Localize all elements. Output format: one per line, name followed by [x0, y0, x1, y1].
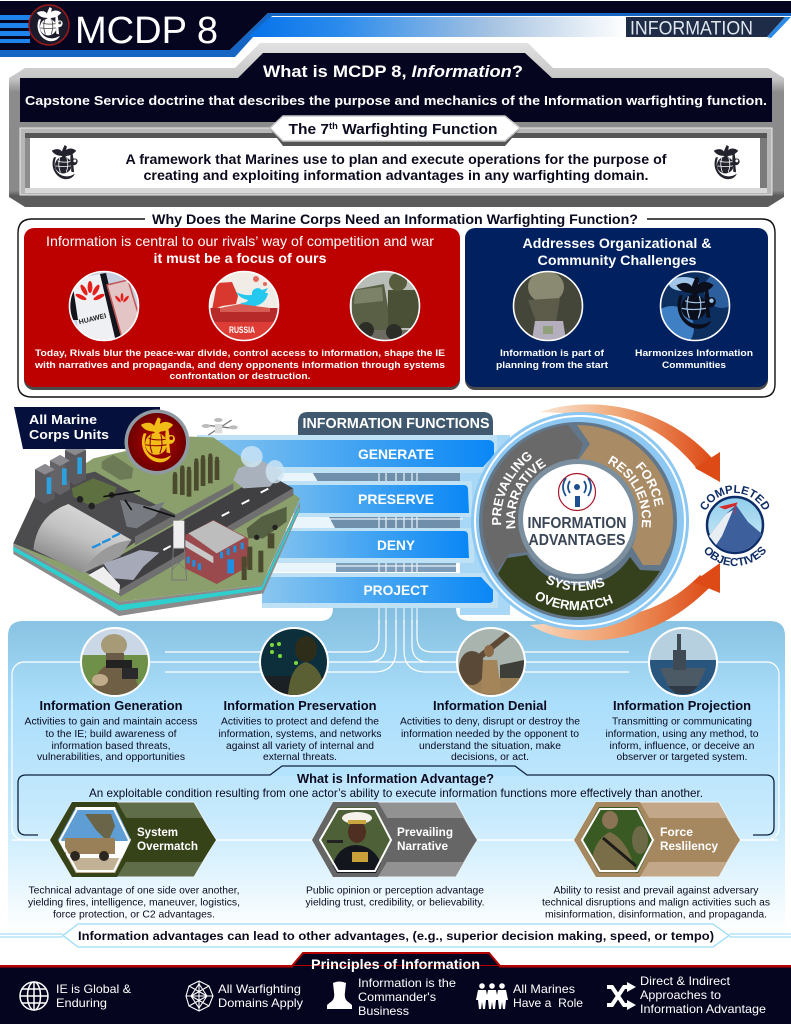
icon: radio tower [558, 474, 596, 510]
drone [202, 418, 238, 435]
hexagon: prevailing narrative: Narrative [397, 839, 448, 853]
callout: other advantages [0, 924, 791, 947]
troops [173, 453, 219, 497]
photo: Huawei phones: HUAWEI [78, 313, 107, 326]
panel: what is MCDP 8 [9, 43, 784, 207]
column: information generation: Activities to gain and maintain access [24, 716, 198, 728]
segment: prevailing narrative [482, 425, 583, 571]
segment: force resilience [577, 425, 673, 565]
ribbon: generate: GENERATE [358, 446, 434, 462]
blue panel captions: Information is part of [500, 348, 605, 359]
principle: domains [186, 981, 303, 1011]
photo: Russia twitter: RUSSIA [229, 325, 255, 336]
illustration: marine corps base diorama [13, 418, 300, 616]
truck and soldiers [242, 507, 287, 580]
principle: direct and indirect: Approaches to [640, 988, 721, 1002]
description: yielding fires, intelligence, maneuver, logistics, [28, 898, 240, 908]
column: information denial: Activities to deny, disrupt or destroy the [400, 716, 581, 728]
segment: prevailing narrative: NARRATIVE [506, 458, 546, 529]
hangar [33, 504, 132, 573]
framework description: creating and exploiting information advantages in any warfighting domain. [144, 168, 648, 183]
hexagon: prevailing narrative [306, 802, 485, 908]
hexagon: force resiliency: Force [660, 825, 693, 839]
arrow: lower orange to objectives [530, 563, 720, 640]
photo: marine with camera [80, 627, 150, 697]
principle: global [20, 982, 131, 1010]
red panel: rivals [24, 228, 460, 390]
column: information denial: information needed by the opponent to [401, 729, 580, 740]
hexagon: system overmatch: Overmatch [137, 839, 198, 853]
principle: domains: All Warfighting [218, 982, 301, 996]
information functions header: INFORMATION FUNCTIONS [302, 416, 490, 432]
icon: completed objectives: COMPLETED [700, 485, 770, 510]
principle: direct and indirect: Information Advantage [640, 1002, 766, 1016]
column: information generation: Information Generation [40, 698, 182, 713]
blue panel: organizational challenges: Community Challenges [538, 253, 696, 268]
header banner [0, 1, 791, 57]
center hub: ADVANTAGES [528, 532, 626, 549]
label: all marine corps units: All Marine [29, 413, 97, 427]
column: information preservation [218, 627, 382, 763]
framework box [20, 128, 772, 195]
blue panel captions [496, 348, 753, 371]
red panel: rivals: Information is central to our rivals’ way of competition and war [46, 233, 434, 249]
chart: information advantages cycle [471, 412, 689, 630]
blue lower panel background [8, 600, 785, 960]
column: information generation: to the IE; build awareness of [46, 729, 177, 740]
comms tower [172, 521, 187, 580]
principle: direct and indirect [607, 974, 766, 1016]
label: all marine corps units: Corps Units [29, 428, 109, 442]
fighter jet [88, 550, 159, 594]
principle: commander: Commander's [358, 990, 436, 1004]
principle: commander: Information is the [358, 976, 456, 990]
hexagon: force resiliency [542, 802, 770, 920]
segment: systems overmatch: SYSTEMS [546, 576, 604, 591]
hexagon: system overmatch: System [137, 825, 178, 839]
column: information generation [24, 627, 198, 763]
framework description: A framework that Marines use to plan and execute operations for the purpose of [126, 152, 667, 167]
description: Ability to resist and prevail against adversary [554, 886, 759, 896]
icon: completed objectives [700, 485, 770, 566]
7th warfighting function tab: The 7 [288, 121, 328, 138]
segment: force resilience: FORCE [636, 462, 664, 507]
principle: global: IE is Global & [56, 982, 131, 996]
principle: commander: Business [358, 1004, 409, 1018]
center hub [518, 459, 638, 579]
description: Technical advantage of one side over another, [28, 886, 240, 896]
hexagon: prevailing narrative: Prevailing [397, 825, 453, 839]
column: information preservation: against all variety of internal and [226, 741, 374, 752]
framework description [126, 152, 667, 183]
column: information projection: Transmitting or communicating [612, 716, 752, 728]
hexagon: force resiliency: Reslilency [660, 839, 718, 853]
header emblem [29, 5, 69, 45]
rivals description: confrontation or destruction. [170, 371, 310, 382]
section: what is information advantage [18, 766, 774, 835]
footer: principles of information [0, 953, 791, 1024]
photo: Huawei phones [68, 271, 142, 345]
7th warfighting function tab: th [329, 121, 338, 131]
column: information preservation: information, systems, and networks [218, 729, 382, 740]
photo: artillery [456, 627, 526, 697]
hexagon: system overmatch [28, 802, 240, 920]
principle: domains: Domains Apply [218, 996, 303, 1010]
blue panel captions: Communities [662, 360, 726, 371]
segment: systems overmatch: OVERMATCH [536, 592, 613, 610]
callout: other advantages: Information advantages can lead to other advantages, (e.g., superior decision making, speed, or tempo) [78, 929, 714, 943]
segment: prevailing narrative: PREVAILING [492, 452, 532, 525]
rivals description: with narratives and propaganda, and deny opponents information through systems [34, 360, 445, 371]
description: force protection, or C2 advantages. [53, 910, 215, 920]
center hub: INFORMATION [528, 515, 626, 532]
photo: military truck [350, 271, 420, 342]
principle: commander [327, 976, 456, 1018]
label: all marine corps units [14, 407, 190, 474]
column: information denial: Information Denial [433, 698, 547, 713]
column: information projection: Information Projection [613, 698, 751, 713]
ribbon: project: PROJECT [364, 582, 429, 598]
column: information denial [400, 627, 581, 763]
blue panel: organizational challenges [465, 228, 768, 390]
ribbon: preserve: PRESERVE [358, 491, 434, 507]
description: misinformation, disinformation, and propaganda. [545, 910, 767, 920]
blue panel captions: planning from the start [496, 360, 609, 371]
column: information generation: vulnerabilities, and opportunities [37, 752, 185, 763]
rivals description: Today, Rivals blur the peace-war divide, control access to information, shape the IE [35, 348, 446, 359]
column: information projection: observer or targeted system. [616, 752, 748, 763]
column: information projection: information, using any method, to [606, 729, 759, 740]
connector lines in blue panel [12, 620, 779, 840]
ribbon: deny: DENY [377, 537, 416, 553]
description: technical disruptions and malign activities such as [542, 898, 770, 908]
column: information generation: information based threats, [52, 741, 170, 752]
description [542, 886, 770, 920]
blue panel: organizational challenges: Addresses Organizational & [522, 236, 712, 251]
photo: warship [648, 627, 718, 697]
column: information preservation: Activities to protect and defend the [221, 716, 380, 728]
connector line across hexagons [12, 839, 778, 841]
icon: emblem left [52, 145, 78, 179]
principle: direct and indirect: Direct & Indirect [640, 974, 731, 988]
blue panel captions: Harmonizes Information [635, 348, 753, 359]
principle: global: Enduring [56, 996, 107, 1010]
segment: systems overmatch [498, 555, 660, 617]
header section label: INFORMATION [630, 18, 753, 40]
footer: principles of information: Principles of Information [311, 956, 480, 972]
ribbon: generate [197, 435, 497, 473]
section: what is information advantage: An exploitable condition resulting from one actor’s ability to execute information functions more effectively than another. [89, 786, 703, 800]
principle: all marines [476, 982, 583, 1010]
description [28, 886, 240, 920]
column: information projection: inform, influence, or deceive an [610, 741, 754, 752]
header title: MCDP 8 [75, 10, 218, 52]
servers [35, 444, 86, 504]
photo: globe emblem [660, 270, 730, 342]
ribbon: deny [262, 528, 474, 563]
principle: all marines: All Marines [513, 982, 575, 996]
section: what is information advantage: What is Information Advantage? [297, 771, 494, 786]
icon: emblem right [714, 145, 740, 179]
heading: What is MCDP 8, Information ? [263, 63, 523, 81]
arrow: upper orange to objectives [540, 404, 720, 482]
principle: all marines: Have a Role [513, 996, 583, 1010]
vehicles [72, 455, 133, 509]
icon: completed objectives: OBJECTIVES [704, 546, 766, 566]
column: information preservation: external threats. [263, 752, 337, 763]
building [185, 520, 248, 584]
description [306, 886, 485, 908]
section heading: Why Does the Marine Corps Need an Information Warfighting Function? [152, 211, 638, 227]
column: information denial: understand the situation, make [419, 741, 562, 752]
connector strips between ribbons [268, 435, 510, 625]
panel: why information warfighting function [18, 211, 775, 397]
column: information projection [606, 627, 759, 763]
7th warfighting function tab: Warfighting Function [338, 121, 498, 138]
7th warfighting function tab [270, 116, 520, 146]
photo: map planning [513, 271, 583, 341]
column: information preservation: Information Preservation [224, 698, 376, 713]
ospreys [103, 446, 284, 528]
photo: operator at screens [259, 627, 329, 697]
segment: force resilience: RESILIENCE [608, 456, 651, 528]
capstone statement: Capstone Service doctrine that describes the purpose and mechanics of the Information warfighting function. [25, 93, 767, 108]
photo: Russia twitter [209, 271, 279, 342]
description: Public opinion or perception advantage [306, 886, 485, 896]
information functions header [298, 412, 493, 435]
description: yielding trust, credibility, or believability. [306, 898, 484, 908]
ribbon: project [262, 573, 498, 608]
icon: gold emblem [124, 410, 190, 474]
rivals description [34, 348, 446, 382]
ribbon: preserve [250, 481, 472, 517]
red panel: rivals: it must be a focus of ours [154, 250, 327, 266]
column: information denial: decisions, or act. [451, 752, 529, 763]
